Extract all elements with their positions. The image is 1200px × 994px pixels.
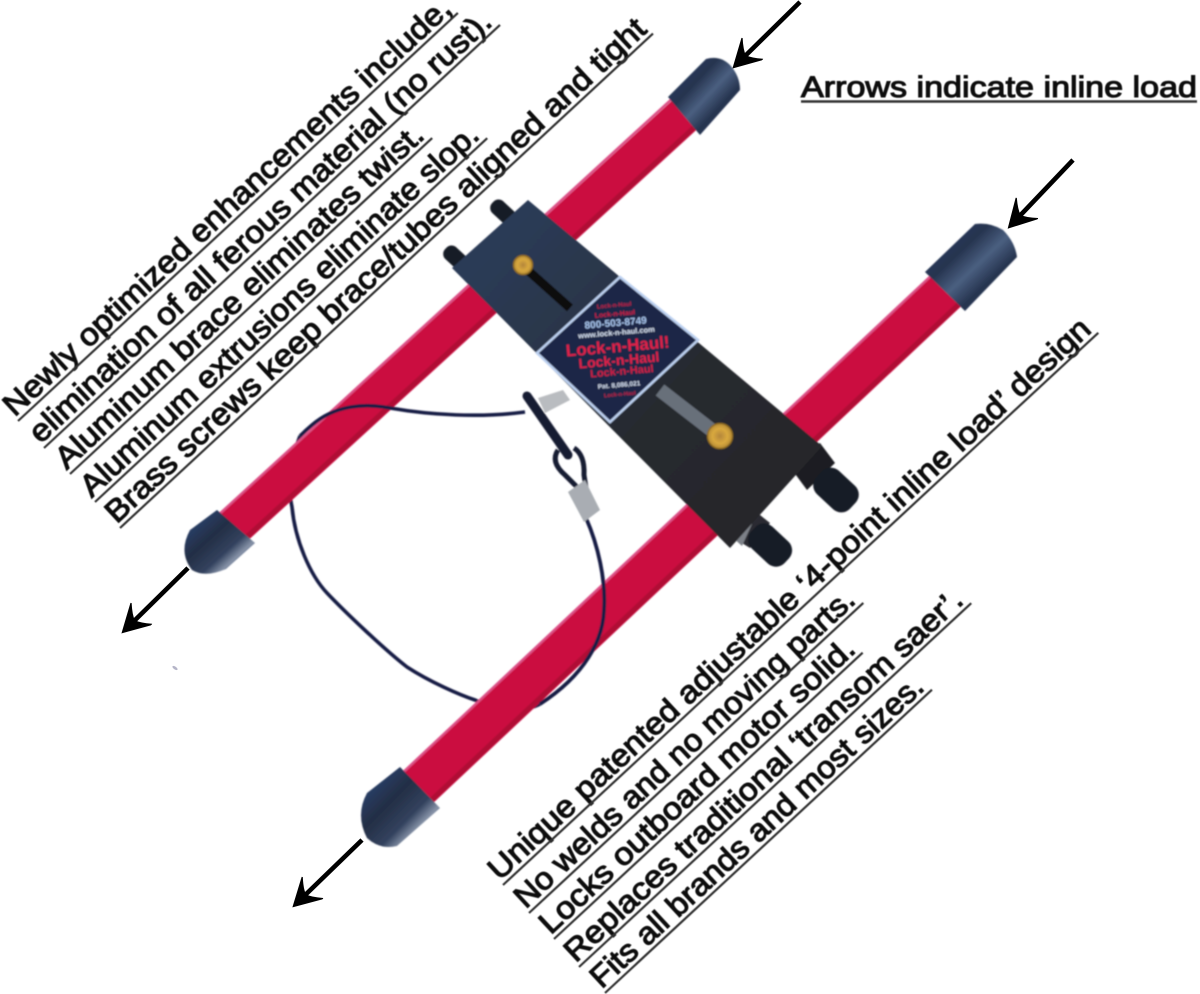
cable section: crimp over lower tube xyxy=(540,518,604,704)
upper tube bottom cap xyxy=(184,510,255,574)
cable section behind tubes xyxy=(290,436,540,710)
brass screw: upper xyxy=(514,256,532,274)
caption block: enhancements: Aluminum extrusions eliminate slop. xyxy=(73,117,486,503)
carabiner xyxy=(527,396,568,455)
caption block: design: Replaces traditional ‘transom saer’. xyxy=(557,582,970,968)
caption block: enhancements: Newly optimized enhancements include, xyxy=(0,0,458,422)
caption block: design: Fits all brands and most sizes. xyxy=(583,668,930,994)
label: lock-n-haul sticker: Lock-n-Haul xyxy=(597,302,632,311)
label: lock-n-haul sticker: Lock-n-Haul xyxy=(578,348,660,371)
brace knobs xyxy=(440,197,864,572)
label: lock-n-haul sticker xyxy=(537,277,698,422)
label: lock-n-haul sticker: Lock-n-Haul! xyxy=(565,333,670,361)
cable crimp xyxy=(568,480,600,522)
crimp at brace xyxy=(538,390,570,413)
lower tube bottom cap xyxy=(361,767,440,847)
caption block: enhancements: Brass screws keep brace/tubes aligned and tight xyxy=(98,10,653,529)
arrows xyxy=(128,2,1073,901)
caption block: design: Unique patented adjustable ‘4-point inline load’ design xyxy=(481,311,1097,886)
heading: arrows note: Arrows indicate inline load xyxy=(801,71,1197,104)
caption block: design: Locks outboard motor solid. xyxy=(532,631,862,940)
caption block: enhancements: Aluminum brace eliminates twist. xyxy=(48,117,431,475)
photo: lock-n-haul product xyxy=(184,58,1017,847)
label: lock-n-haul sticker: Pat. 8,086,021 xyxy=(598,380,641,391)
label: lock-n-haul sticker: www.lock-n-haul.com xyxy=(577,325,655,340)
lower red tube xyxy=(397,272,960,806)
cable loop xyxy=(555,448,586,488)
label: lock-n-haul sticker: Lock-n-Haul xyxy=(590,363,654,380)
brass screw: lower xyxy=(708,424,732,448)
caption block: enhancements: elimination of all ferous material (no rust). xyxy=(22,4,498,449)
upper tube top cap xyxy=(668,58,740,135)
label: lock-n-haul sticker: Lock-n-Haul xyxy=(594,309,635,320)
slot: lower xyxy=(660,390,718,435)
aluminum brace xyxy=(452,200,822,548)
speck xyxy=(172,665,178,671)
slot: upper xyxy=(523,266,570,308)
label: lock-n-haul sticker: Lock-n-Haul xyxy=(604,391,636,399)
upper red tube xyxy=(215,96,700,543)
label: lock-n-haul sticker: 800-503-8749 xyxy=(584,315,648,332)
cable section: carabiner to upper tube xyxy=(300,406,525,436)
lower tube top cap xyxy=(925,224,1017,311)
caption block: design: No welds and no moving parts. xyxy=(507,581,862,914)
